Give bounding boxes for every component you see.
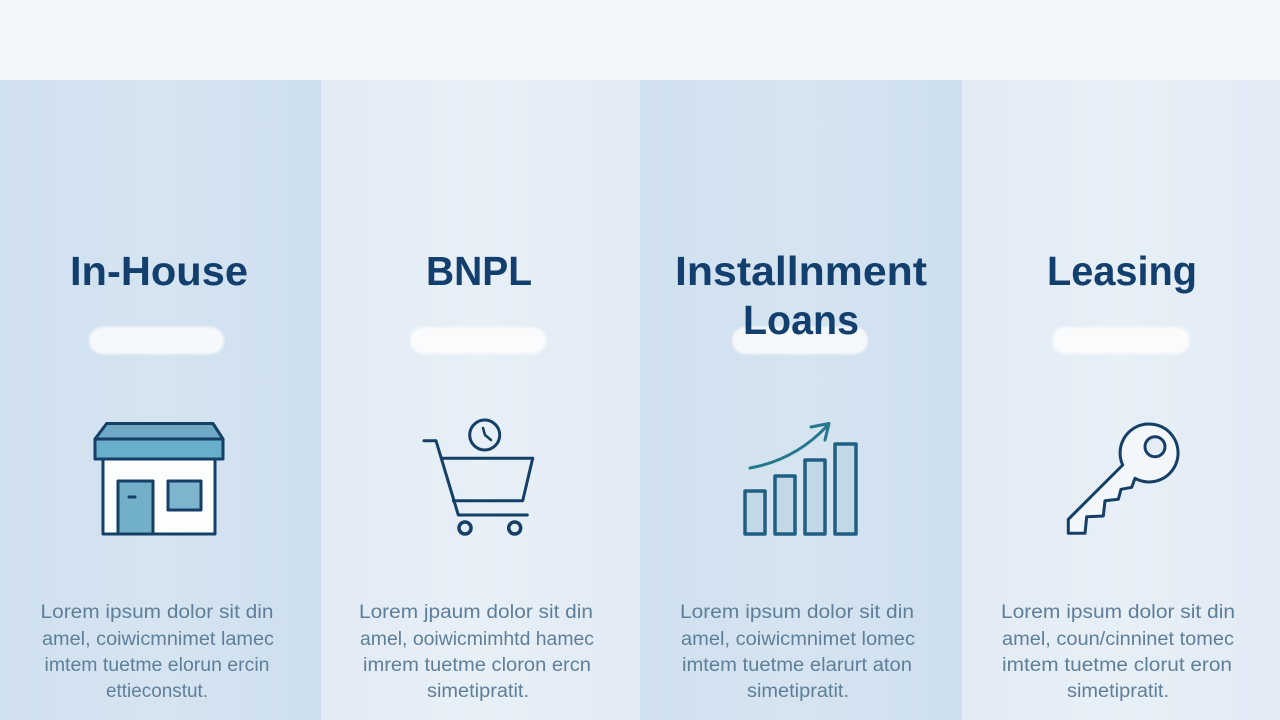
pill placeholder [732, 327, 868, 354]
description text: Lorem jpaum dolor sit din [359, 602, 593, 623]
description text: imtem tuetme elarurt aton [682, 655, 912, 676]
description text: simetipratit. [747, 681, 849, 702]
description text [40, 602, 274, 702]
description text: amel, coun/cinninet tomec [1002, 629, 1234, 650]
icon: key [1068, 424, 1178, 533]
description text: simetipratit. [1067, 681, 1169, 702]
heading: Installment Loans [675, 248, 927, 343]
description text [680, 602, 915, 702]
description text: Lorem ipsum dolor sit din [1001, 602, 1235, 623]
description text: Lorem ipsum dolor sit din [40, 602, 274, 623]
description text: Lorem ipsum dolor sit din [680, 602, 914, 623]
pill placeholder [89, 327, 224, 354]
pill placeholder [1052, 327, 1190, 354]
description text: simetipratit. [427, 681, 529, 702]
heading: Installment Loans: Loans [743, 297, 859, 343]
description text: amel, coiwicmnimet lomec [681, 629, 915, 650]
heading: In-House: In-House [70, 248, 248, 294]
panel: Leasing [962, 80, 1280, 720]
panel: Installment Loans [640, 80, 962, 720]
panel: BNPL [321, 80, 640, 720]
heading: BNPL: BNPL [426, 248, 532, 294]
top band [0, 0, 1280, 80]
icon: storefront [95, 424, 223, 534]
panel: In-House [0, 80, 321, 720]
description text: amel, coiwicmnimet lamec [42, 629, 274, 650]
heading: Leasing: Leasing [1047, 248, 1197, 294]
icon: shopping cart with clock [424, 420, 533, 534]
description text: imtem tuetme elorun ercin [44, 655, 270, 676]
description text: amel, ooiwicmimhtd hamec [360, 629, 594, 650]
description text [1001, 602, 1235, 702]
icon: rising bar chart with arrow [745, 424, 856, 534]
description text: imtem tuetme clorut eron [1002, 655, 1232, 676]
heading: Installment Loans: Installnment [675, 248, 927, 294]
pill placeholder [410, 327, 546, 354]
description text [359, 602, 594, 702]
description text: imrem tuetme cloron ercn [363, 655, 591, 676]
description text: ettieconstut. [106, 681, 208, 702]
